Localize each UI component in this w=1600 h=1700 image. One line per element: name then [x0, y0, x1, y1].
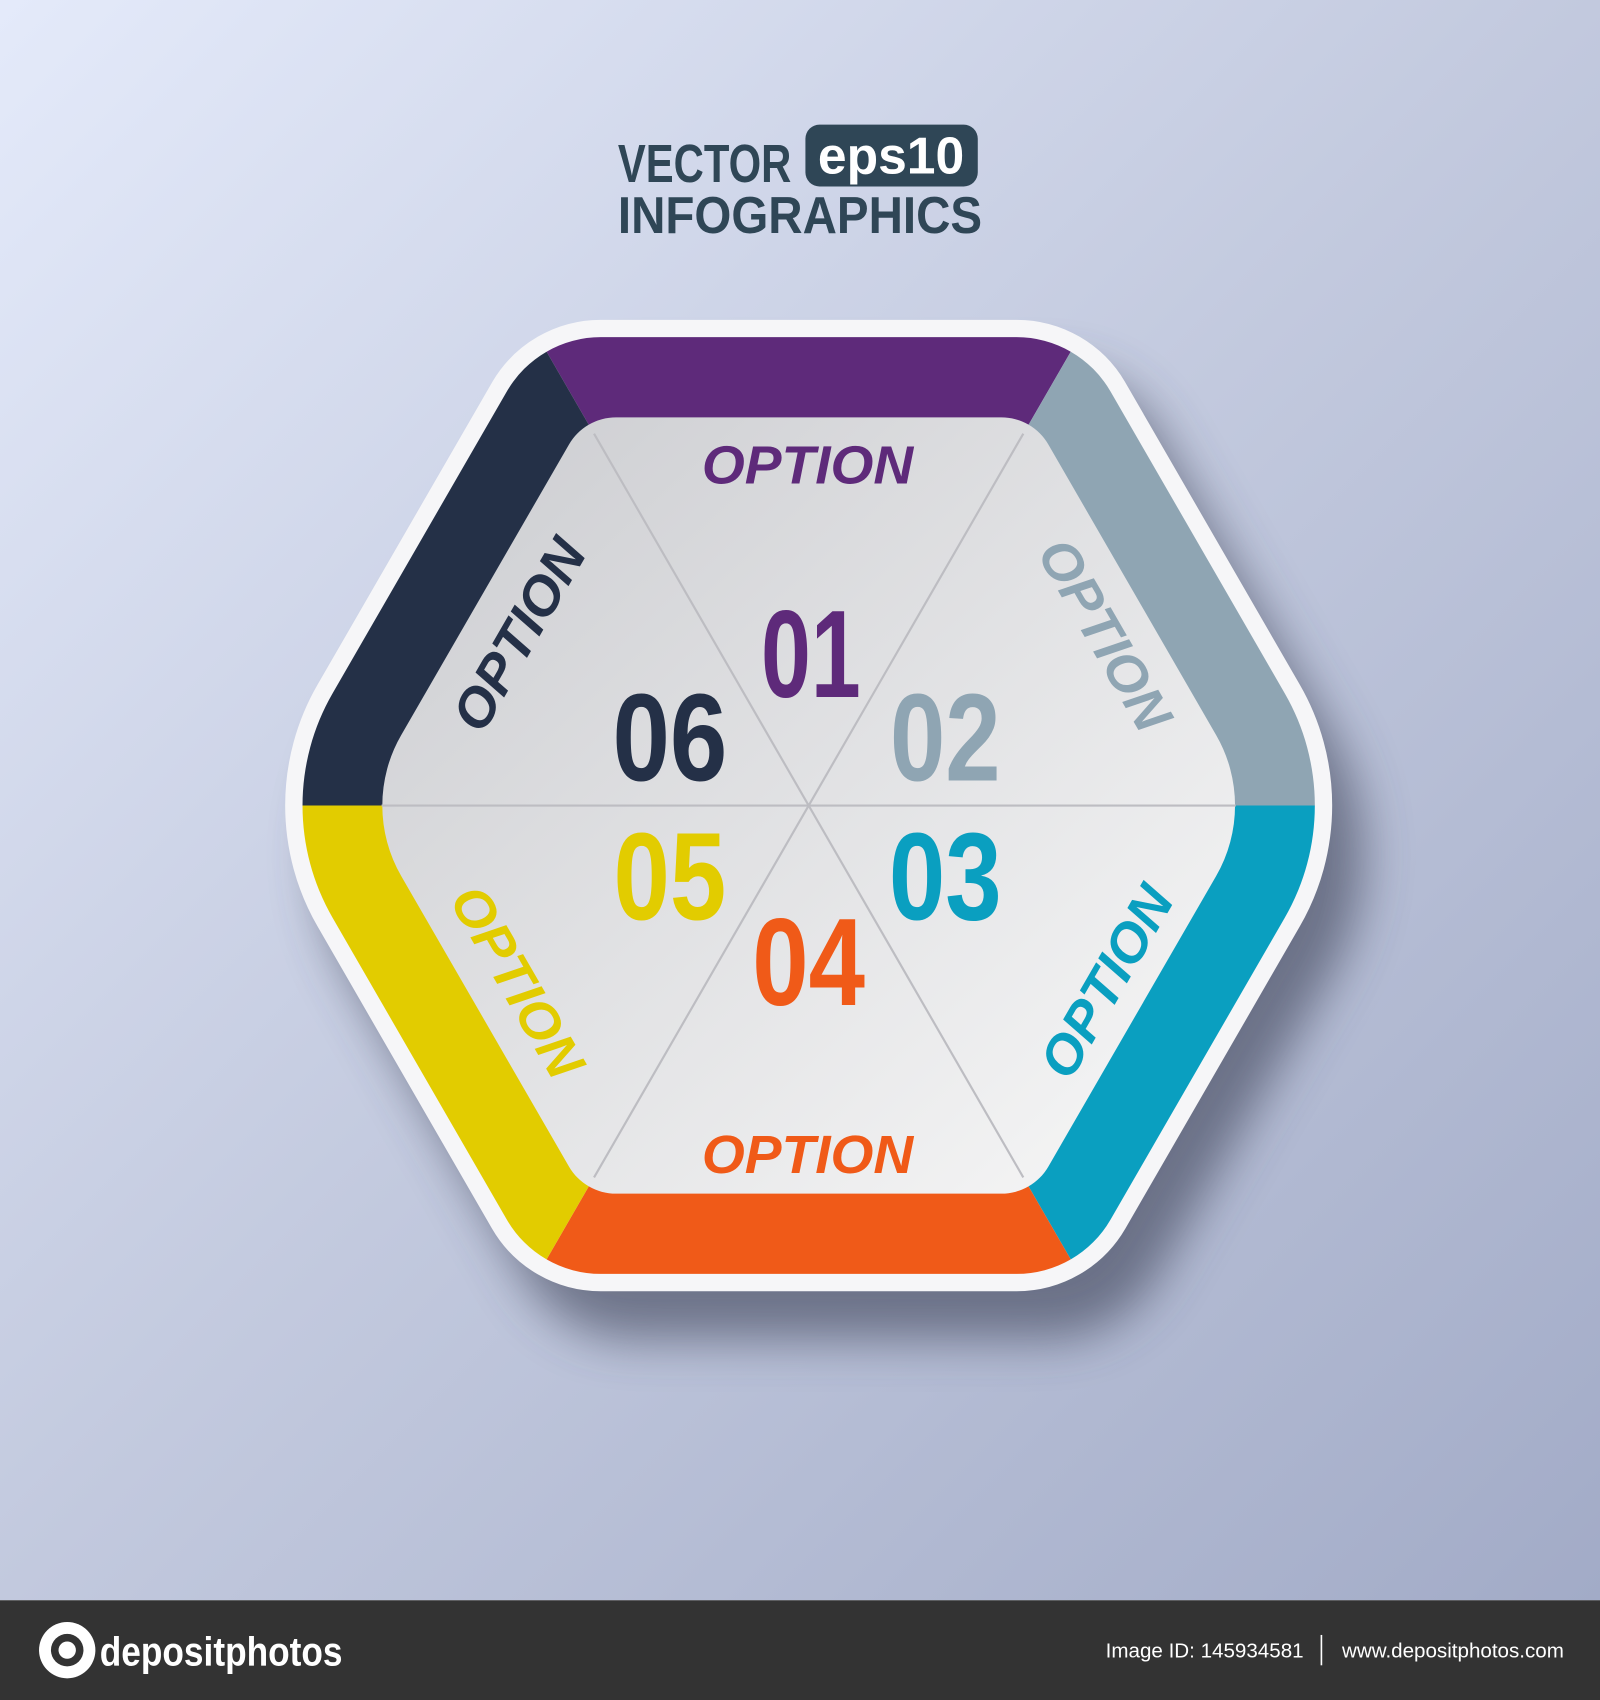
title: INFOGRAPHICS [618, 187, 982, 245]
option labels [438, 436, 1187, 1185]
numbers: 01 [761, 585, 861, 724]
option labels: OPTION [1028, 874, 1187, 1088]
footer [0, 1600, 1600, 1700]
option labels: OPTION [1026, 528, 1184, 743]
numbers: 02 [890, 669, 1001, 808]
colored band segments [302, 337, 1315, 1274]
option labels: OPTION [702, 1125, 915, 1185]
numbers: 06 [612, 669, 727, 808]
option labels: OPTION [438, 875, 597, 1090]
footer: www.depositphotos.com [1341, 1640, 1564, 1663]
title [618, 125, 982, 245]
title: eps10 [818, 127, 964, 185]
option labels: OPTION [702, 436, 915, 496]
numbers: 05 [614, 807, 726, 946]
numbers: 04 [752, 893, 865, 1032]
hexagon shadow [335, 386, 1347, 1323]
hexagon white border [303, 337, 1315, 1274]
option labels: OPTION [441, 527, 599, 742]
numbers [612, 585, 1002, 1032]
title: VECTOR [618, 134, 791, 194]
footer: Image ID: 145934581 [1106, 1640, 1304, 1663]
inner hexagon [382, 417, 1235, 1194]
numbers: 03 [889, 807, 1002, 946]
footer: depositphotos [100, 1628, 343, 1674]
